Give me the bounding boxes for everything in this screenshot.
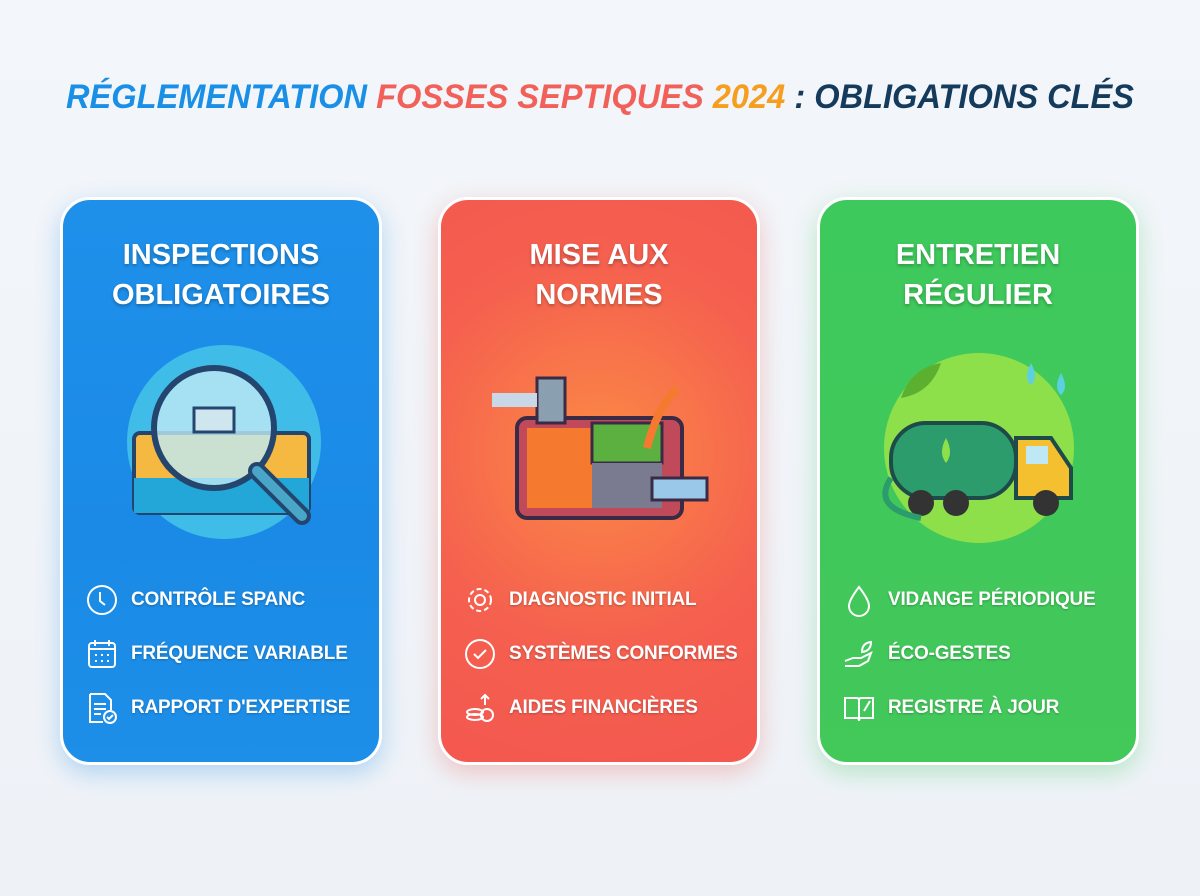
- heading: ENTRETIEN: [896, 239, 1060, 271]
- list: [87, 585, 350, 724]
- item: aides: [466, 694, 698, 722]
- heading: MISE AUX: [529, 239, 669, 271]
- title: RÉGLEMENTATION FOSSES SEPTIQUES 2024 : OBLIGATIONS CLÉS: [66, 78, 1134, 116]
- item: registre: [844, 696, 1059, 721]
- item: rapport: [89, 693, 350, 724]
- heading: RÉGULIER: [903, 279, 1053, 311]
- item: frequence: [88, 640, 348, 668]
- item: vidange: VIDANGE PÉRIODIQUE: [888, 589, 1096, 610]
- item: eco-gestes: [844, 640, 1011, 667]
- list: [844, 586, 1096, 721]
- heading: INSPECTIONS: [123, 239, 319, 271]
- item: controle: CONTRÔLE SPANC: [131, 589, 305, 610]
- panel: mise aux normes: [438, 197, 760, 765]
- heading: OBLIGATOIRES: [112, 279, 330, 311]
- heading: [896, 239, 1060, 311]
- item: registre: REGISTRE À JOUR: [888, 697, 1059, 718]
- item: frequence: FRÉQUENCE VARIABLE: [131, 643, 348, 664]
- icon: vacuum truck: [882, 353, 1074, 543]
- item: vidange: [848, 586, 1096, 617]
- heading: NORMES: [535, 279, 663, 311]
- item: aides: AIDES FINANCIÈRES: [509, 697, 698, 718]
- panel: entretien: [817, 197, 1139, 765]
- panel: inspections: [60, 197, 382, 765]
- item: controle: [87, 585, 306, 615]
- item: rapport: RAPPORT D'EXPERTISE: [131, 697, 350, 718]
- icon: magnifier over tank: [127, 345, 321, 539]
- item: eco-gestes: ÉCO-GESTES: [888, 643, 1011, 664]
- heading: [112, 239, 330, 311]
- item: diagnostic: DIAGNOSTIC INITIAL: [509, 589, 696, 610]
- item: systemes: SYSTÈMES CONFORMES: [509, 643, 738, 664]
- icon: septic system: [492, 376, 708, 520]
- heading: [529, 239, 669, 311]
- list: [465, 588, 738, 722]
- item: systemes: [465, 639, 738, 669]
